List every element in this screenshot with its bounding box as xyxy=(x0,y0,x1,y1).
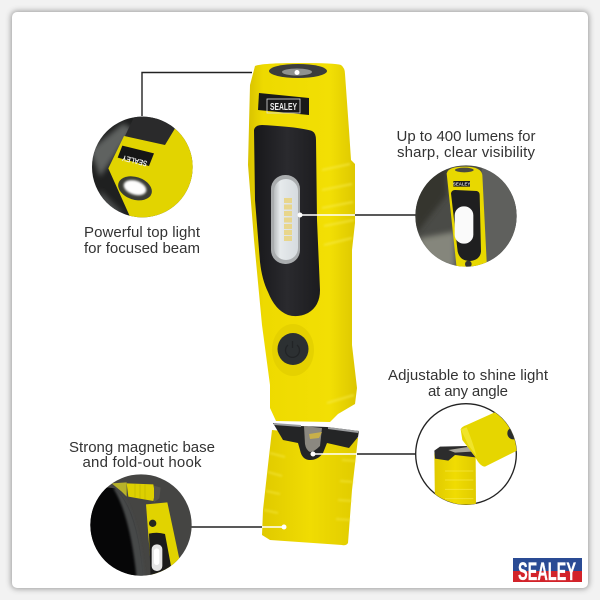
circle photo: magnetic base xyxy=(87,474,192,578)
lower grip ridges xyxy=(264,453,356,520)
grip ridges xyxy=(322,164,354,403)
circle photo: top light xyxy=(92,116,193,218)
text: lumens: Up to 400 lumens for xyxy=(396,128,536,145)
text: focused beam: for focused beam xyxy=(84,240,200,257)
circle photo: top light: SEALEY xyxy=(121,153,148,168)
leader line: base xyxy=(191,524,286,530)
text: angle: at any angle xyxy=(428,383,508,400)
product: inspection light xyxy=(248,63,359,545)
COB light window xyxy=(271,175,300,264)
hinge bracket xyxy=(273,423,359,460)
top dot xyxy=(294,70,300,75)
brand badge: SEALEY xyxy=(270,101,297,113)
circle photo: lumens xyxy=(415,165,517,267)
text: adjustable: Adjustable to shine light xyxy=(388,367,549,384)
leader line: hinge xyxy=(310,452,416,456)
leader line: top light xyxy=(142,72,297,116)
circle outline: adjustable xyxy=(416,404,519,507)
text: hook: and fold-out hook xyxy=(82,454,202,471)
brand badge xyxy=(258,93,309,115)
text: visibility: sharp, clear visibility xyxy=(397,144,536,161)
black panel xyxy=(254,125,320,316)
text: top light: Powerful top light xyxy=(84,224,201,241)
lower body xyxy=(262,430,358,545)
text: magnetic base: Strong magnetic base xyxy=(69,439,215,456)
power button xyxy=(272,324,314,376)
circle photo: lumens: SEALEY xyxy=(453,182,470,187)
leader line: LED window xyxy=(298,212,416,218)
top lens xyxy=(269,64,327,78)
upper body xyxy=(248,63,357,422)
